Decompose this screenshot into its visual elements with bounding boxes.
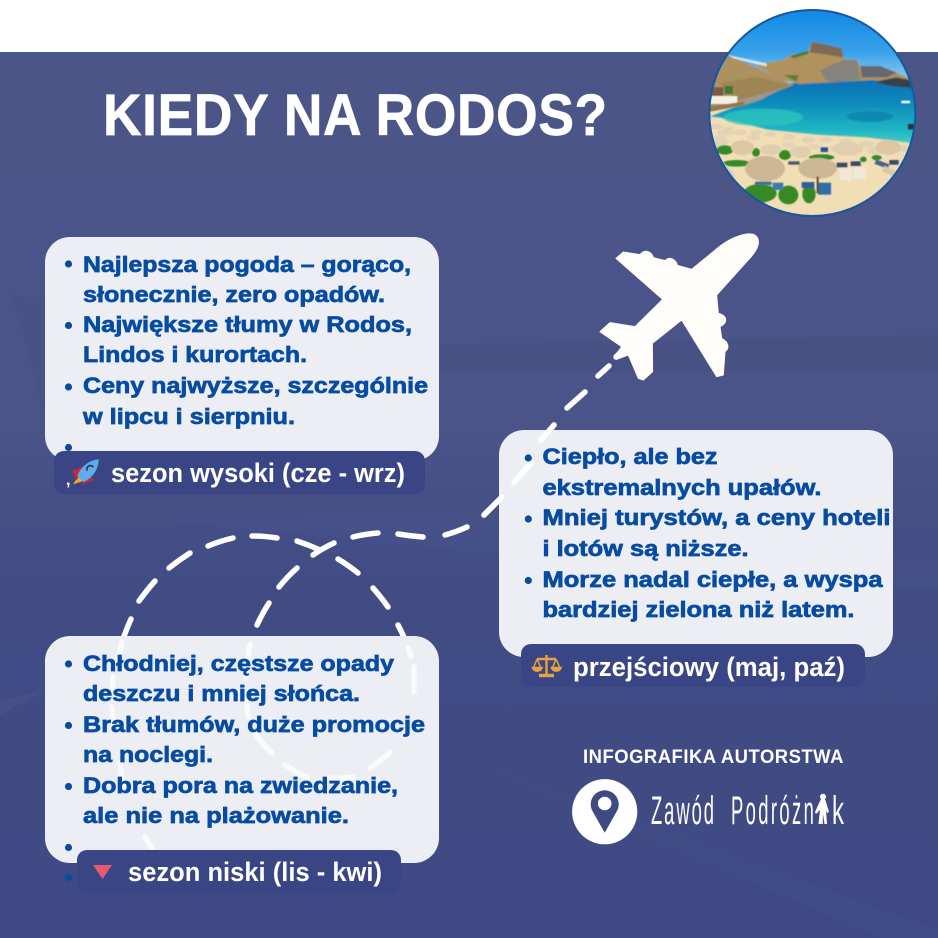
logo: wordmark: Zawód [651,788,714,833]
icon: scales [533,655,560,676]
dashed flight path [122,350,623,648]
logo: wordmark: k [832,789,845,833]
text: przejsciowy list: i lotów są niższe. [542,536,748,561]
logo: wordmark [651,788,845,833]
label: sezon niski [77,850,401,893]
text: przejsciowy list [525,444,890,622]
text: sezon wysoki list: w lipcu i sierpniu. [82,404,295,429]
text: sezon wysoki list [65,252,428,451]
icon: rocket [72,459,99,485]
label: sezon niski: sezon niski (lis - kwi) [128,857,382,887]
credit heading: INFOGRAFIKA AUTORSTWA [583,747,844,768]
dashed flight path seen through cards [112,642,414,848]
panel: przejsciowy card [499,430,893,657]
logo: wordmark: i [820,789,824,833]
logo: wordmark: Podróżn [731,788,814,833]
text: sezon wysoki list: Największe tłumy w Rodos, [83,312,412,337]
text: sezon niski list [65,651,425,881]
text: sezon niski list: deszczu i mniej słońca. [83,681,360,706]
text: sezon niski list: Dobra pora na zwiedzanie, [83,773,398,798]
text: przejsciowy list: Ciepło, ale bez [542,444,718,469]
icon: red triangle [93,865,112,879]
text: sezon wysoki list: Najlepsza pogoda – gorąco, [83,252,411,277]
text: przejsciowy list: Morze nadal ciepłe, a wyspa [542,567,883,592]
text: przejsciowy list: ekstremalnych upałów. [542,475,822,500]
text: sezon wysoki list: słonecznie, zero opadów. [83,282,385,307]
title: KIEDY NA RODOS? [103,83,607,147]
label: sezon wysoki: , [66,472,70,489]
text: sezon wysoki list: Ceny najwyższe, szczególnie [83,373,428,398]
text: przejsciowy list: Mniej turystów, a ceny hoteli [542,505,890,530]
dashes crossing the przejsciowy card [484,425,554,515]
panel: sezon niski card [45,636,439,863]
text: sezon niski list: Chłodniej, częstsze opady [83,651,395,676]
photo: Lindos beach [707,3,920,220]
label: sezon wysoki [54,451,425,494]
text: sezon wysoki list: Lindos i kurortach. [83,342,307,367]
text: sezon niski list: na noclegi. [83,742,213,767]
panel: sezon wysoki card [45,237,439,461]
label: przejsciowy [521,644,865,687]
airplane icon [600,234,758,380]
text: sezon niski list: Brak tłumów, duże promocje [83,712,425,737]
label: sezon wysoki: sezon wysoki (cze - wrz) [111,458,405,488]
text: sezon niski list: ale nie na plażowanie. [83,803,349,828]
logo: pin badge [572,779,637,844]
label: przejsciowy: przejściowy (maj, paź) [573,652,845,682]
text: przejsciowy list: bardziej zielona niż latem. [542,597,854,622]
